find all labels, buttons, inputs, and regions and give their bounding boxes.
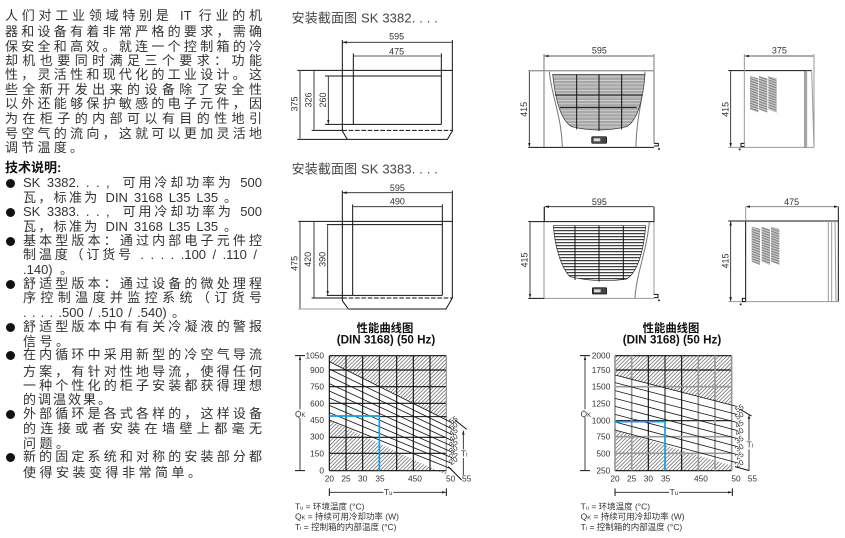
inner temperature labels: 35 bbox=[733, 434, 745, 446]
x axis labels: 50 bbox=[446, 473, 456, 483]
drawing: cutout SK 3382: 326 bbox=[304, 92, 314, 107]
drawing: cutout SK 3383 bbox=[290, 162, 452, 309]
drawing: side view SK 3383: 475 bbox=[784, 197, 799, 207]
inner temperature labels: 20 bbox=[733, 458, 745, 470]
y axis labels: 0 bbox=[319, 465, 324, 475]
heading: technical description: 技术说明: bbox=[5, 160, 61, 175]
bullet list: technical specifications: 问题。 bbox=[23, 436, 69, 451]
y axis labels: 750 bbox=[310, 382, 324, 392]
chart: performance curve SK 3382: Tu bbox=[384, 487, 392, 497]
drawing: front view SK 3383 bbox=[520, 197, 660, 301]
hatched regions bbox=[615, 356, 732, 471]
drawing: cutout SK 3383: 490 bbox=[390, 196, 405, 206]
y axis labels: 150 bbox=[310, 448, 324, 458]
x axis labels bbox=[610, 473, 757, 483]
legend bbox=[581, 501, 685, 532]
bullet list: technical specifications: SK 3383. . . , 可用冷却功率为 500 bbox=[23, 204, 262, 219]
bullet list: technical specifications: 在内循环中采用新型的冷空气导流 bbox=[23, 347, 262, 362]
x axis labels: 35 bbox=[661, 473, 671, 483]
intro paragraph: 却机也要同时满足三个要求：功能 bbox=[5, 53, 262, 68]
chart: performance curve SK 3382 bbox=[294, 321, 472, 532]
inner temperature labels: 25 bbox=[733, 450, 745, 462]
legend: Tu = 环境温度 (°C) bbox=[295, 501, 365, 511]
y axis labels: 900 bbox=[310, 365, 324, 375]
drawing: side view SK 3382 bbox=[720, 46, 814, 150]
bullet list: technical specifications: 一种个性化的柜子安装都获得理想 bbox=[23, 378, 262, 393]
bullet list: technical specifications: 制温度（订货号 . . . . .100 / .110 / bbox=[23, 247, 257, 262]
bullet list: technical specifications: 舒适型版本：通过设备的微处理程 bbox=[23, 276, 262, 291]
inner temperature labels: 35 bbox=[447, 437, 459, 450]
inner temperature labels: 50 bbox=[733, 410, 745, 422]
chart: performance curve SK 3383: Ti bbox=[747, 440, 753, 450]
bullet list: technical specifications: 的连接或者安装在墙壁上都毫无 bbox=[23, 421, 262, 436]
bullet list: technical specifications: 瓦，标准为 DIN 3168 L35 L35 。 bbox=[23, 219, 237, 234]
inner temperature labels: 30 bbox=[447, 443, 459, 456]
grid bbox=[329, 356, 446, 471]
y axis labels: 600 bbox=[310, 398, 324, 408]
bullet list: technical specifications: 基本型版本：通过内部电子元件控 bbox=[23, 233, 262, 248]
inner temperature labels: 20 bbox=[447, 455, 459, 467]
drawing: cutout SK 3382: 375 bbox=[290, 96, 300, 111]
chart title: 性能曲线图 bbox=[357, 321, 413, 335]
chart: performance curve SK 3383: (DIN 3168) (50 Hz) bbox=[623, 333, 721, 346]
intro paragraph: 性，灵活性和现代化的工业设计。这 bbox=[5, 67, 262, 82]
inner temperature labels: 25 bbox=[447, 449, 459, 461]
y axis labels bbox=[305, 351, 324, 475]
chart: performance curve SK 3383: Q̇K bbox=[581, 409, 591, 419]
x axis labels: 20 bbox=[325, 473, 334, 483]
inner temperature labels: 45 bbox=[733, 418, 745, 430]
side vents bbox=[750, 76, 777, 113]
intro paragraph: 为在柜子的内部可以有目的性地引 bbox=[5, 111, 262, 126]
inner temperature labels: 40 bbox=[447, 432, 459, 444]
x axis labels: 55 bbox=[748, 473, 757, 483]
drawing: side view SK 3382: 415 bbox=[720, 102, 730, 117]
bullet list: technical specifications bbox=[6, 175, 262, 480]
bullet list: technical specifications: 使得安装变得非常简单。 bbox=[23, 465, 201, 480]
y axis labels: 1750 bbox=[592, 365, 611, 375]
chart: performance curve SK 3382: (DIN 3168) (50 Hz) bbox=[337, 333, 435, 346]
intro paragraph bbox=[5, 8, 262, 155]
legend: Ti = 控制箱的内部温度 (°C) bbox=[295, 522, 397, 532]
bullet list: technical specifications: 外部循环是各式各样的，这样设备 bbox=[23, 406, 262, 421]
drawing: cutout SK 3383: 595 bbox=[390, 183, 405, 193]
x axis labels: 25 bbox=[341, 473, 351, 483]
y axis labels: 1500 bbox=[592, 382, 611, 392]
grid bbox=[615, 356, 732, 471]
bullet list: technical specifications: 方案，有针对性地导流，使得任何 bbox=[23, 364, 262, 379]
drawing: front view SK 3382 bbox=[519, 46, 660, 150]
inner temperature labels: 30 bbox=[733, 442, 745, 454]
section title SK 3382: 安装截面图 SK 3382. . . . bbox=[292, 10, 438, 25]
drawing: cutout SK 3383: 475 bbox=[290, 256, 300, 271]
control display bbox=[592, 288, 607, 294]
intro paragraph: 号空气的流向，这就可以更加灵活地 bbox=[5, 126, 262, 141]
chart: performance curve SK 3383 bbox=[579, 321, 757, 532]
intro paragraph: 器和设备有着非常严格的要求，需确 bbox=[5, 24, 262, 39]
inner temperature labels bbox=[733, 402, 745, 470]
drawing: front view SK 3383: 595 bbox=[592, 197, 607, 207]
chart: performance curve SK 3382: Ti bbox=[461, 448, 467, 458]
y axis labels: 1000 bbox=[592, 415, 611, 425]
y axis labels: 250 bbox=[596, 465, 611, 475]
inner temperature labels: 45 bbox=[447, 426, 459, 438]
legend bbox=[295, 501, 399, 532]
louver grille bbox=[553, 226, 646, 281]
drawing: cutout SK 3382: 595 bbox=[389, 32, 404, 42]
drawing: cutout SK 3382: 475 bbox=[389, 46, 404, 56]
drawing: front view SK 3382: 595 bbox=[592, 46, 607, 56]
x axis labels: 50 bbox=[731, 473, 741, 483]
drawing: front view SK 3382: 415 bbox=[519, 102, 529, 117]
side vents bbox=[752, 227, 779, 265]
axis arrows bbox=[580, 356, 752, 496]
chart title: 性能曲线图 bbox=[643, 321, 699, 335]
inner temperature labels: 40 bbox=[733, 426, 745, 438]
bullet list: technical specifications: 序控制温度并监控系统（订货号 bbox=[23, 290, 262, 305]
drawing: cutout SK 3383: 420 bbox=[303, 252, 313, 267]
bullet list: technical specifications: SK 3382. . . , 可用冷却功率为 500 bbox=[23, 175, 262, 190]
axis arrows bbox=[295, 356, 467, 496]
bullet list: technical specifications: . . . . .500 / .510 / .540) 。 bbox=[23, 305, 185, 320]
drawing: cutout SK 3382: 260 bbox=[318, 92, 328, 107]
x axis labels: 30 bbox=[644, 473, 653, 483]
intro paragraph: 保安全和高效。就连一个控制箱的冷 bbox=[5, 39, 262, 54]
chart: performance curve SK 3382: Q̇K bbox=[295, 409, 305, 419]
x axis labels: 55 bbox=[462, 473, 472, 483]
drawing: cutout SK 3383: 390 bbox=[318, 252, 328, 267]
y axis labels: 1050 bbox=[305, 351, 324, 361]
intro paragraph: 以外还能够保护敏感的电子元件，因 bbox=[5, 96, 262, 111]
drawing: side view SK 3382: 375 bbox=[772, 46, 787, 56]
y axis labels: 750 bbox=[596, 432, 611, 442]
x axis labels: 450 bbox=[408, 473, 422, 483]
performance lines bbox=[615, 375, 737, 463]
inner temperature labels: 55 bbox=[733, 402, 745, 414]
y axis labels bbox=[592, 351, 611, 475]
intro paragraph: 人们对工业领域特别是 IT 行业的机 bbox=[5, 8, 262, 23]
performance lines bbox=[329, 362, 452, 469]
bullet list: technical specifications: 舒适型版本中有有关冷凝液的警报 bbox=[23, 319, 262, 334]
legend: Q̇K = 持续可用冷却功率 (W) bbox=[581, 511, 685, 522]
bullet list: technical specifications: 信号。 bbox=[23, 334, 69, 349]
x axis labels bbox=[325, 473, 472, 483]
y axis labels: 300 bbox=[310, 432, 324, 442]
bullet list: technical specifications: .140)。 bbox=[23, 262, 73, 277]
blue operating point bbox=[615, 422, 665, 471]
y axis labels: 2000 bbox=[592, 351, 611, 361]
bullet list: technical specifications: 的调温效果。 bbox=[23, 392, 111, 407]
y axis labels: 1250 bbox=[592, 398, 611, 408]
drawing: side view SK 3383 bbox=[720, 197, 838, 305]
inner temperature labels: 55 bbox=[447, 414, 459, 426]
x axis labels: 30 bbox=[358, 473, 368, 483]
drawing: front view SK 3383: 415 bbox=[520, 252, 530, 267]
blue operating point bbox=[329, 416, 379, 471]
section title SK 3383: 安装截面图 SK 3383. . . . bbox=[292, 162, 438, 177]
drawing: side view SK 3383: 415 bbox=[720, 253, 730, 268]
legend: Tu = 环境温度 (°C) bbox=[581, 501, 650, 511]
bullet list: technical specifications: 新的固定系统和对称的安装部分都 bbox=[23, 449, 262, 464]
x axis labels: 450 bbox=[694, 473, 708, 483]
hatched regions bbox=[329, 356, 446, 475]
chart: performance curve SK 3383: Tu bbox=[670, 487, 678, 497]
louver grille bbox=[553, 74, 645, 130]
legend: Q̇K = 持续可用冷却功率 (W) bbox=[295, 511, 399, 522]
inner temperature labels bbox=[447, 414, 459, 467]
control display bbox=[592, 137, 607, 143]
drawing: cutout SK 3382 bbox=[290, 10, 452, 139]
x axis labels: 25 bbox=[627, 473, 637, 483]
y axis labels: 450 bbox=[310, 415, 324, 425]
x axis labels: 35 bbox=[375, 473, 385, 483]
legend: Ti = 控制箱的内部温度 (°C) bbox=[581, 522, 682, 532]
intro paragraph: 调节温度。 bbox=[5, 140, 83, 155]
y axis labels: 500 bbox=[596, 448, 611, 458]
bullet list: technical specifications: 瓦，标准为 DIN 3168 L35 L35 。 bbox=[23, 190, 237, 205]
inner temperature labels: 50 bbox=[447, 420, 459, 432]
x axis labels: 20 bbox=[610, 473, 620, 483]
intro paragraph: 些全新开发出来的设备除了安全性 bbox=[5, 82, 262, 97]
